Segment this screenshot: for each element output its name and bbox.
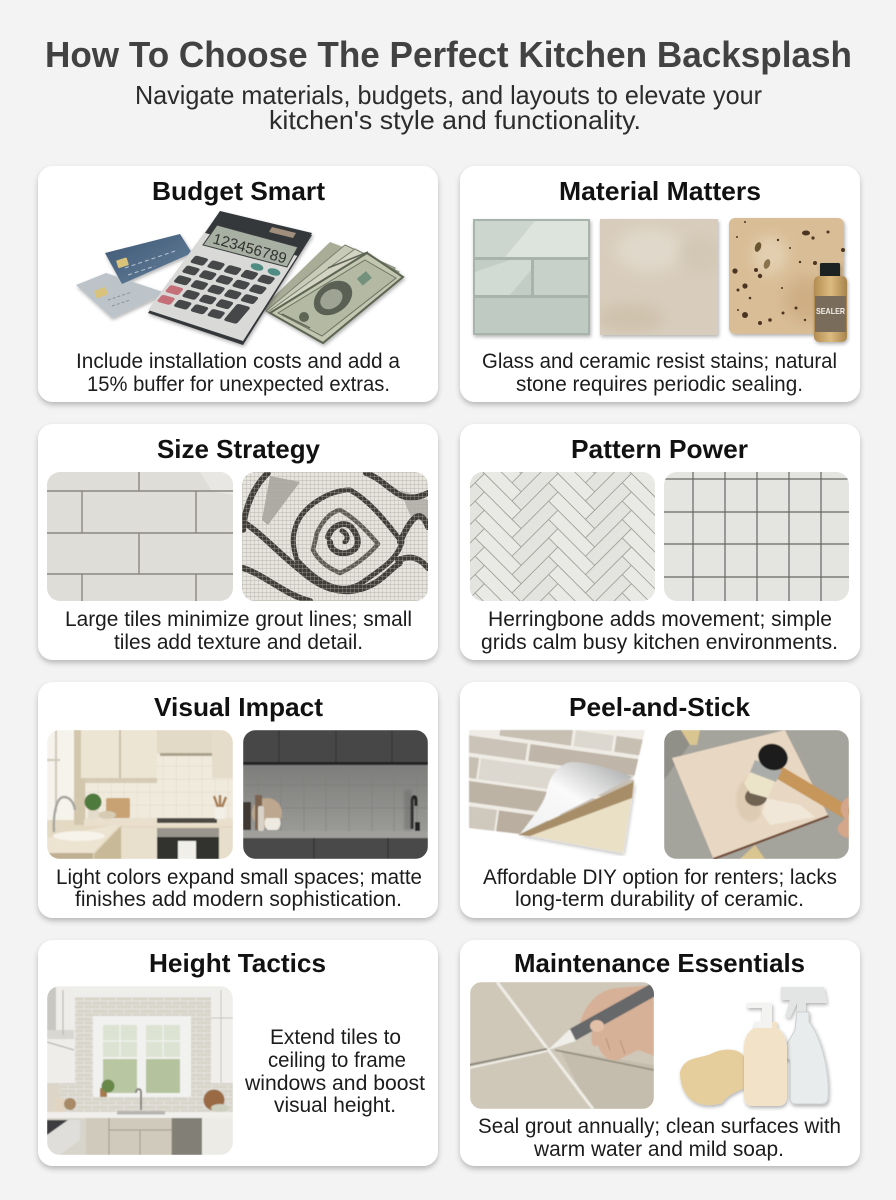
text: pattern tip xyxy=(481,608,838,654)
image: ceramic stone tile xyxy=(595,219,720,335)
panel: peel-and-stick xyxy=(453,682,860,918)
text: maintenance tip: warm water and mild soap. xyxy=(533,1138,784,1161)
text: material tip xyxy=(482,350,837,396)
subtitle: Navigate materials, budgets, and layouts to elevate your xyxy=(135,80,762,110)
heading: peel-and-stick: Peel-and-Stick xyxy=(569,692,751,722)
panel: material matters xyxy=(460,166,860,402)
text: maintenance tip: Seal grout annually; clean surfaces with xyxy=(478,1115,841,1138)
text: maintenance tip xyxy=(478,1115,841,1161)
text: visual tip: Light colors expand small spaces; matte xyxy=(56,866,422,889)
text: size tip: tiles add texture and detail. xyxy=(114,631,363,654)
text: height tip: ceiling to frame xyxy=(268,1049,406,1072)
icon: soap dispenser xyxy=(744,1003,787,1106)
heading: pattern power: Pattern Power xyxy=(571,434,748,464)
text: visual tip xyxy=(56,866,422,911)
text: pattern tip: grids calm busy kitchen environments. xyxy=(481,631,838,654)
icon: sealer bottle: SEALER xyxy=(816,306,845,316)
panel: maintenance essentials xyxy=(460,940,860,1166)
icon: credit cards xyxy=(76,234,192,318)
text: budget tip: Include installation costs and add a xyxy=(76,350,400,373)
title: How To Choose The Perfect Kitchen Backsplash xyxy=(45,34,852,75)
heading: size strategy: Size Strategy xyxy=(157,434,321,464)
icon: spray bottle xyxy=(780,987,828,1104)
image: mallet on tile xyxy=(664,730,849,860)
text: budget tip: 15% buffer for unexpected extras. xyxy=(87,373,390,396)
heading: budget smart: Budget Smart xyxy=(152,176,325,206)
heading: height tactics: Height Tactics xyxy=(149,948,326,978)
panel: pattern power xyxy=(457,424,863,666)
panel: size strategy xyxy=(38,424,438,660)
image: tall tiled kitchen xyxy=(47,986,233,1155)
icon: dollar bills xyxy=(262,242,403,343)
text: height tip xyxy=(244,1026,425,1117)
icon: calculator: 123456789 xyxy=(211,230,288,267)
image: square grid tiles xyxy=(664,472,849,601)
text: height tip: windows and boost xyxy=(244,1072,425,1095)
heading: maintenance essentials: Maintenance Essentials xyxy=(514,948,805,978)
icon: sponge xyxy=(680,1050,745,1105)
text: peel tip: long-term durability of ceramic. xyxy=(515,888,804,911)
icon: sealer bottle xyxy=(814,263,847,342)
image: small mosaic tiles xyxy=(242,472,428,601)
subtitle xyxy=(135,80,762,135)
text: height tip: visual height. xyxy=(274,1094,396,1117)
image: dark matte kitchen xyxy=(243,730,428,859)
text: material tip: stone requires periodic sealing. xyxy=(516,373,803,396)
text: size tip xyxy=(65,608,412,654)
text: peel tip xyxy=(483,866,837,911)
text: material tip: Glass and ceramic resist stains; natural xyxy=(482,350,837,373)
panel: height tactics xyxy=(38,940,438,1166)
image: sealing grout xyxy=(469,982,654,1109)
image: glass subway tile xyxy=(473,219,590,335)
text: budget tip xyxy=(76,350,400,396)
text: pattern tip: Herringbone adds movement; simple xyxy=(488,608,832,631)
text: peel tip: Affordable DIY option for renters; lacks xyxy=(483,866,837,889)
heading: visual impact: Visual Impact xyxy=(154,692,323,722)
image: light kitchen xyxy=(47,730,233,859)
subtitle: kitchen's style and functionality. xyxy=(269,105,641,135)
image: herringbone tiles xyxy=(470,472,655,601)
panel: budget smart xyxy=(38,166,438,402)
icon: calculator xyxy=(148,211,312,345)
text: visual tip: finishes add modern sophistication. xyxy=(75,888,402,911)
text: size tip: Large tiles minimize grout lines; small xyxy=(65,608,412,631)
image: large subway tiles xyxy=(47,472,233,601)
image: peel and stick sheet xyxy=(468,730,645,856)
heading: material matters: Material Matters xyxy=(559,176,761,206)
image: natural stone tile xyxy=(729,218,845,334)
panel: visual impact xyxy=(38,682,438,918)
text: height tip: Extend tiles to xyxy=(270,1026,401,1049)
